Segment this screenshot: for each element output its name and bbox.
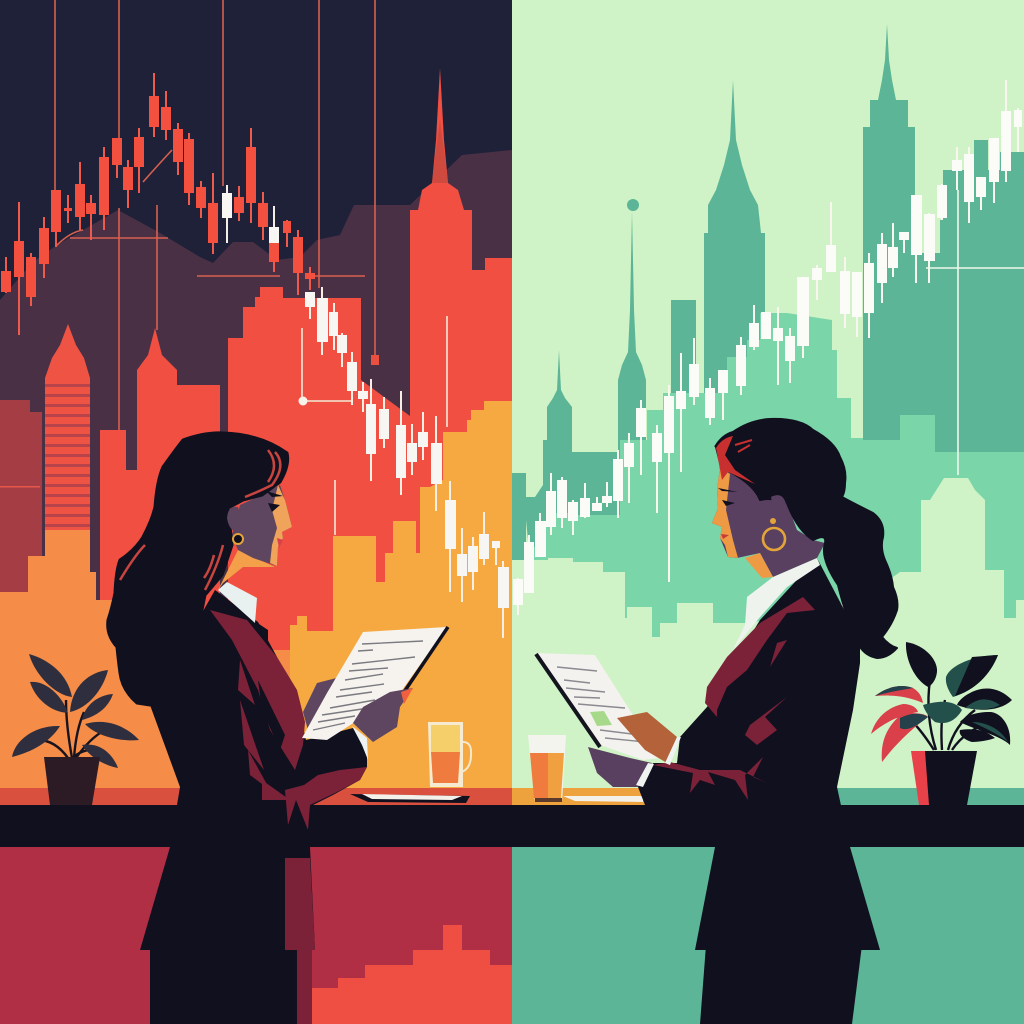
dark upper leaves <box>906 642 937 687</box>
paper text lines <box>313 641 423 730</box>
far hand <box>303 675 352 730</box>
plant: left potted plant <box>12 654 139 805</box>
earring stud <box>770 518 776 524</box>
hair and ponytail <box>715 419 898 658</box>
crimson lower wall <box>0 847 512 1024</box>
cuffs <box>636 737 681 787</box>
leaves left plant <box>12 654 139 768</box>
hair highlights <box>120 450 280 590</box>
tablet <box>535 653 660 760</box>
paper edge <box>402 627 448 695</box>
sleeve folds <box>653 757 767 800</box>
upper hand <box>617 712 677 763</box>
pot right plant <box>923 751 977 805</box>
near hand <box>353 688 413 742</box>
chart: white candlesticks, falling trend <box>222 185 509 638</box>
table top <box>0 805 1024 847</box>
tablet text lines <box>557 667 645 742</box>
tablet green chart <box>590 711 612 726</box>
legs <box>700 945 862 1024</box>
hoop earring <box>763 528 785 550</box>
jacket maroon lapel and highlights <box>210 610 367 950</box>
panel: bearish left background <box>0 0 512 1024</box>
centre leaf <box>923 702 962 723</box>
figure: right woman <box>535 419 898 1024</box>
table tablet left highlight <box>362 794 462 800</box>
orange skyline left <box>0 530 290 790</box>
neck <box>218 550 275 590</box>
chart: white candlesticks, rising trend <box>513 80 1024 615</box>
jacket silhouette <box>638 558 880 950</box>
table tablet right <box>563 796 643 802</box>
jacket silhouette <box>140 590 367 950</box>
figure: left woman <box>108 433 448 1024</box>
striped tower <box>45 324 90 530</box>
red skyline with towers <box>60 68 512 700</box>
shirt collar <box>218 582 257 623</box>
ear <box>227 507 241 533</box>
eye and brow <box>266 491 283 512</box>
hair <box>108 433 288 705</box>
cuff <box>352 726 368 760</box>
chart: red candlesticks, left peak <box>1 73 315 335</box>
table tablet left <box>350 794 470 803</box>
tablet dark edge <box>536 654 600 747</box>
sky gap column <box>851 320 863 438</box>
amber skyline right <box>260 401 512 790</box>
ledge strip amber <box>512 788 650 806</box>
ledge strip green <box>800 788 1024 806</box>
lower ledge strip <box>0 788 512 806</box>
glass: right beer glass <box>528 735 566 802</box>
face light side <box>270 485 292 566</box>
chart lines: thin red indicator lines <box>0 0 379 488</box>
red tower spire band <box>432 120 448 183</box>
pot left plant <box>44 757 100 805</box>
dark red side building <box>0 400 42 605</box>
dark green skyline <box>512 24 1024 590</box>
jacket maroon lapel <box>705 597 815 717</box>
collar <box>733 558 820 650</box>
mid green skyline <box>512 313 1024 640</box>
neck light <box>745 553 773 578</box>
lips <box>277 538 283 548</box>
legs <box>150 940 312 1024</box>
trouser stripe <box>297 950 312 1024</box>
neck and shaded face side <box>712 467 825 577</box>
ear <box>771 495 787 521</box>
face <box>232 485 292 566</box>
hand on tablet back <box>588 747 652 787</box>
face light side <box>712 467 738 558</box>
paper <box>302 627 447 740</box>
plum distant skyline <box>0 150 512 700</box>
earring <box>233 534 243 544</box>
pale foreground skyline <box>512 478 1024 790</box>
plant: right potted plant <box>871 642 1012 805</box>
hair red highlights <box>716 436 755 484</box>
glass: left beer mug <box>428 722 471 787</box>
eye and lips <box>718 488 738 506</box>
green lower wall <box>512 847 1024 1024</box>
panel: bullish right background <box>512 0 1024 1024</box>
red leaves <box>871 686 928 762</box>
reflected red skyline <box>308 925 512 1024</box>
